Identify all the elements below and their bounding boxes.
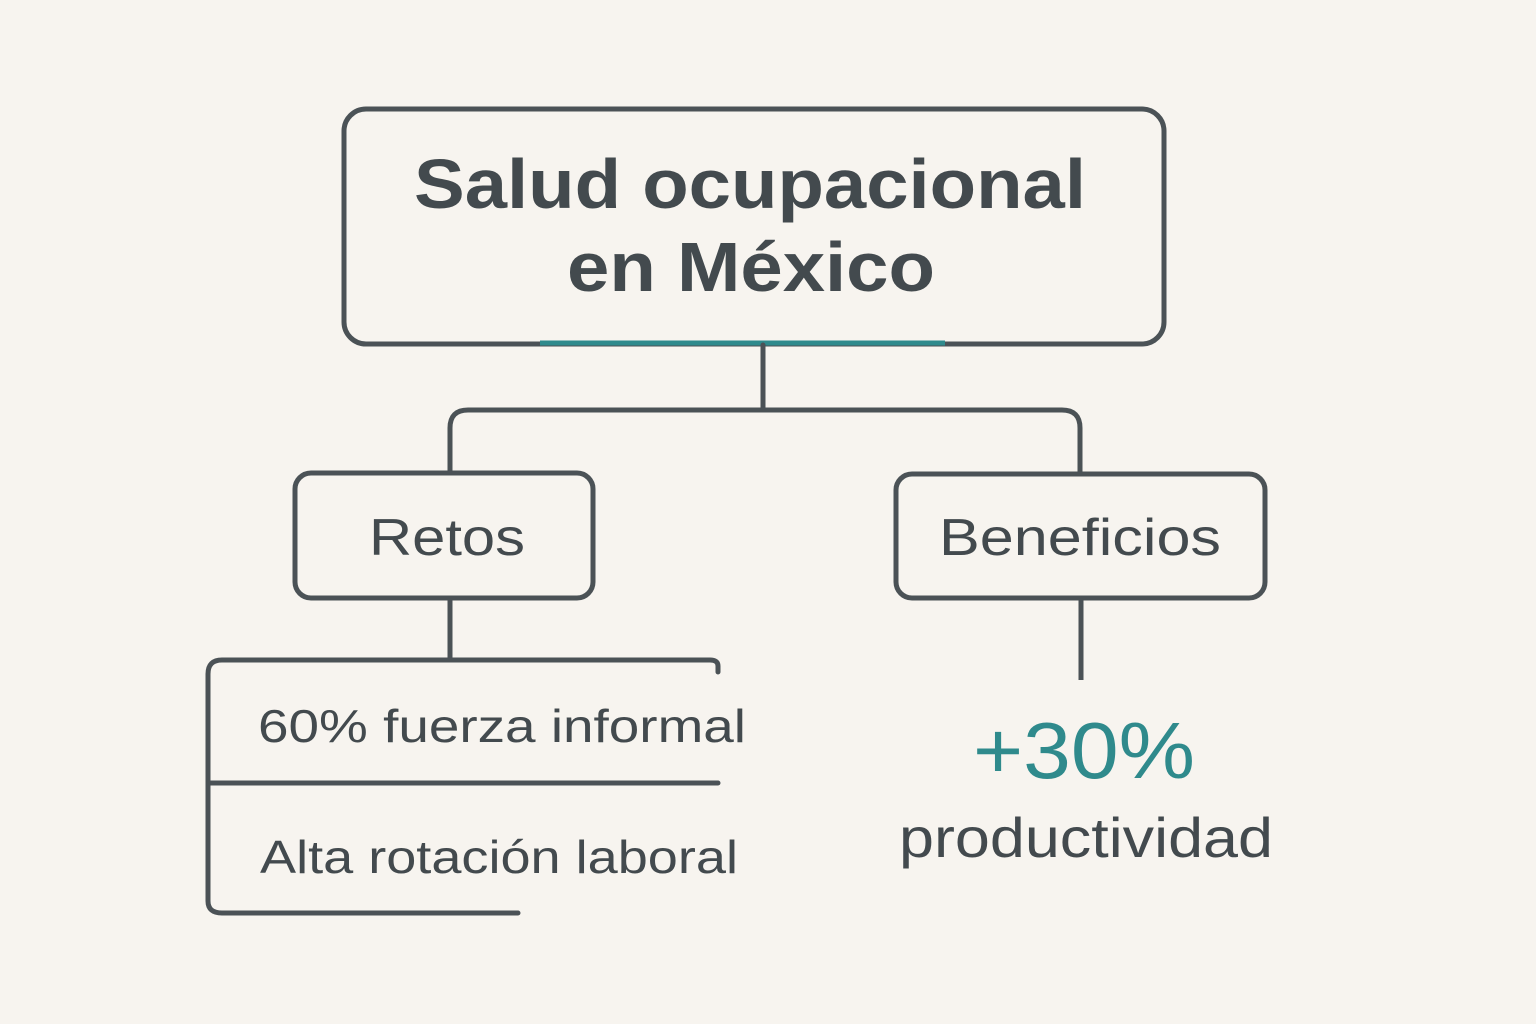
title: en México	[567, 228, 935, 306]
item: 60% fuerza informal: 60% fuerza informal	[258, 700, 746, 752]
title: Salud ocupacional	[414, 145, 1086, 223]
stat: +30% productividad	[899, 706, 1273, 869]
list: retos	[208, 660, 746, 913]
title box	[344, 109, 1164, 344]
box: Beneficios	[896, 474, 1265, 598]
stat: +30% productividad: productividad	[899, 806, 1273, 869]
stat: +30% productividad: +30%	[973, 706, 1195, 795]
connector: Beneficios to stat	[1078, 598, 1084, 680]
item: Alta rotación laboral: Alta rotación laboral	[260, 831, 738, 883]
connector: title to branches	[450, 345, 1080, 472]
connector: Retos to list	[448, 598, 452, 660]
box: Retos	[295, 473, 593, 598]
box: Beneficios: Beneficios	[939, 509, 1221, 567]
box: Retos: Retos	[369, 509, 525, 567]
title	[414, 145, 1086, 306]
